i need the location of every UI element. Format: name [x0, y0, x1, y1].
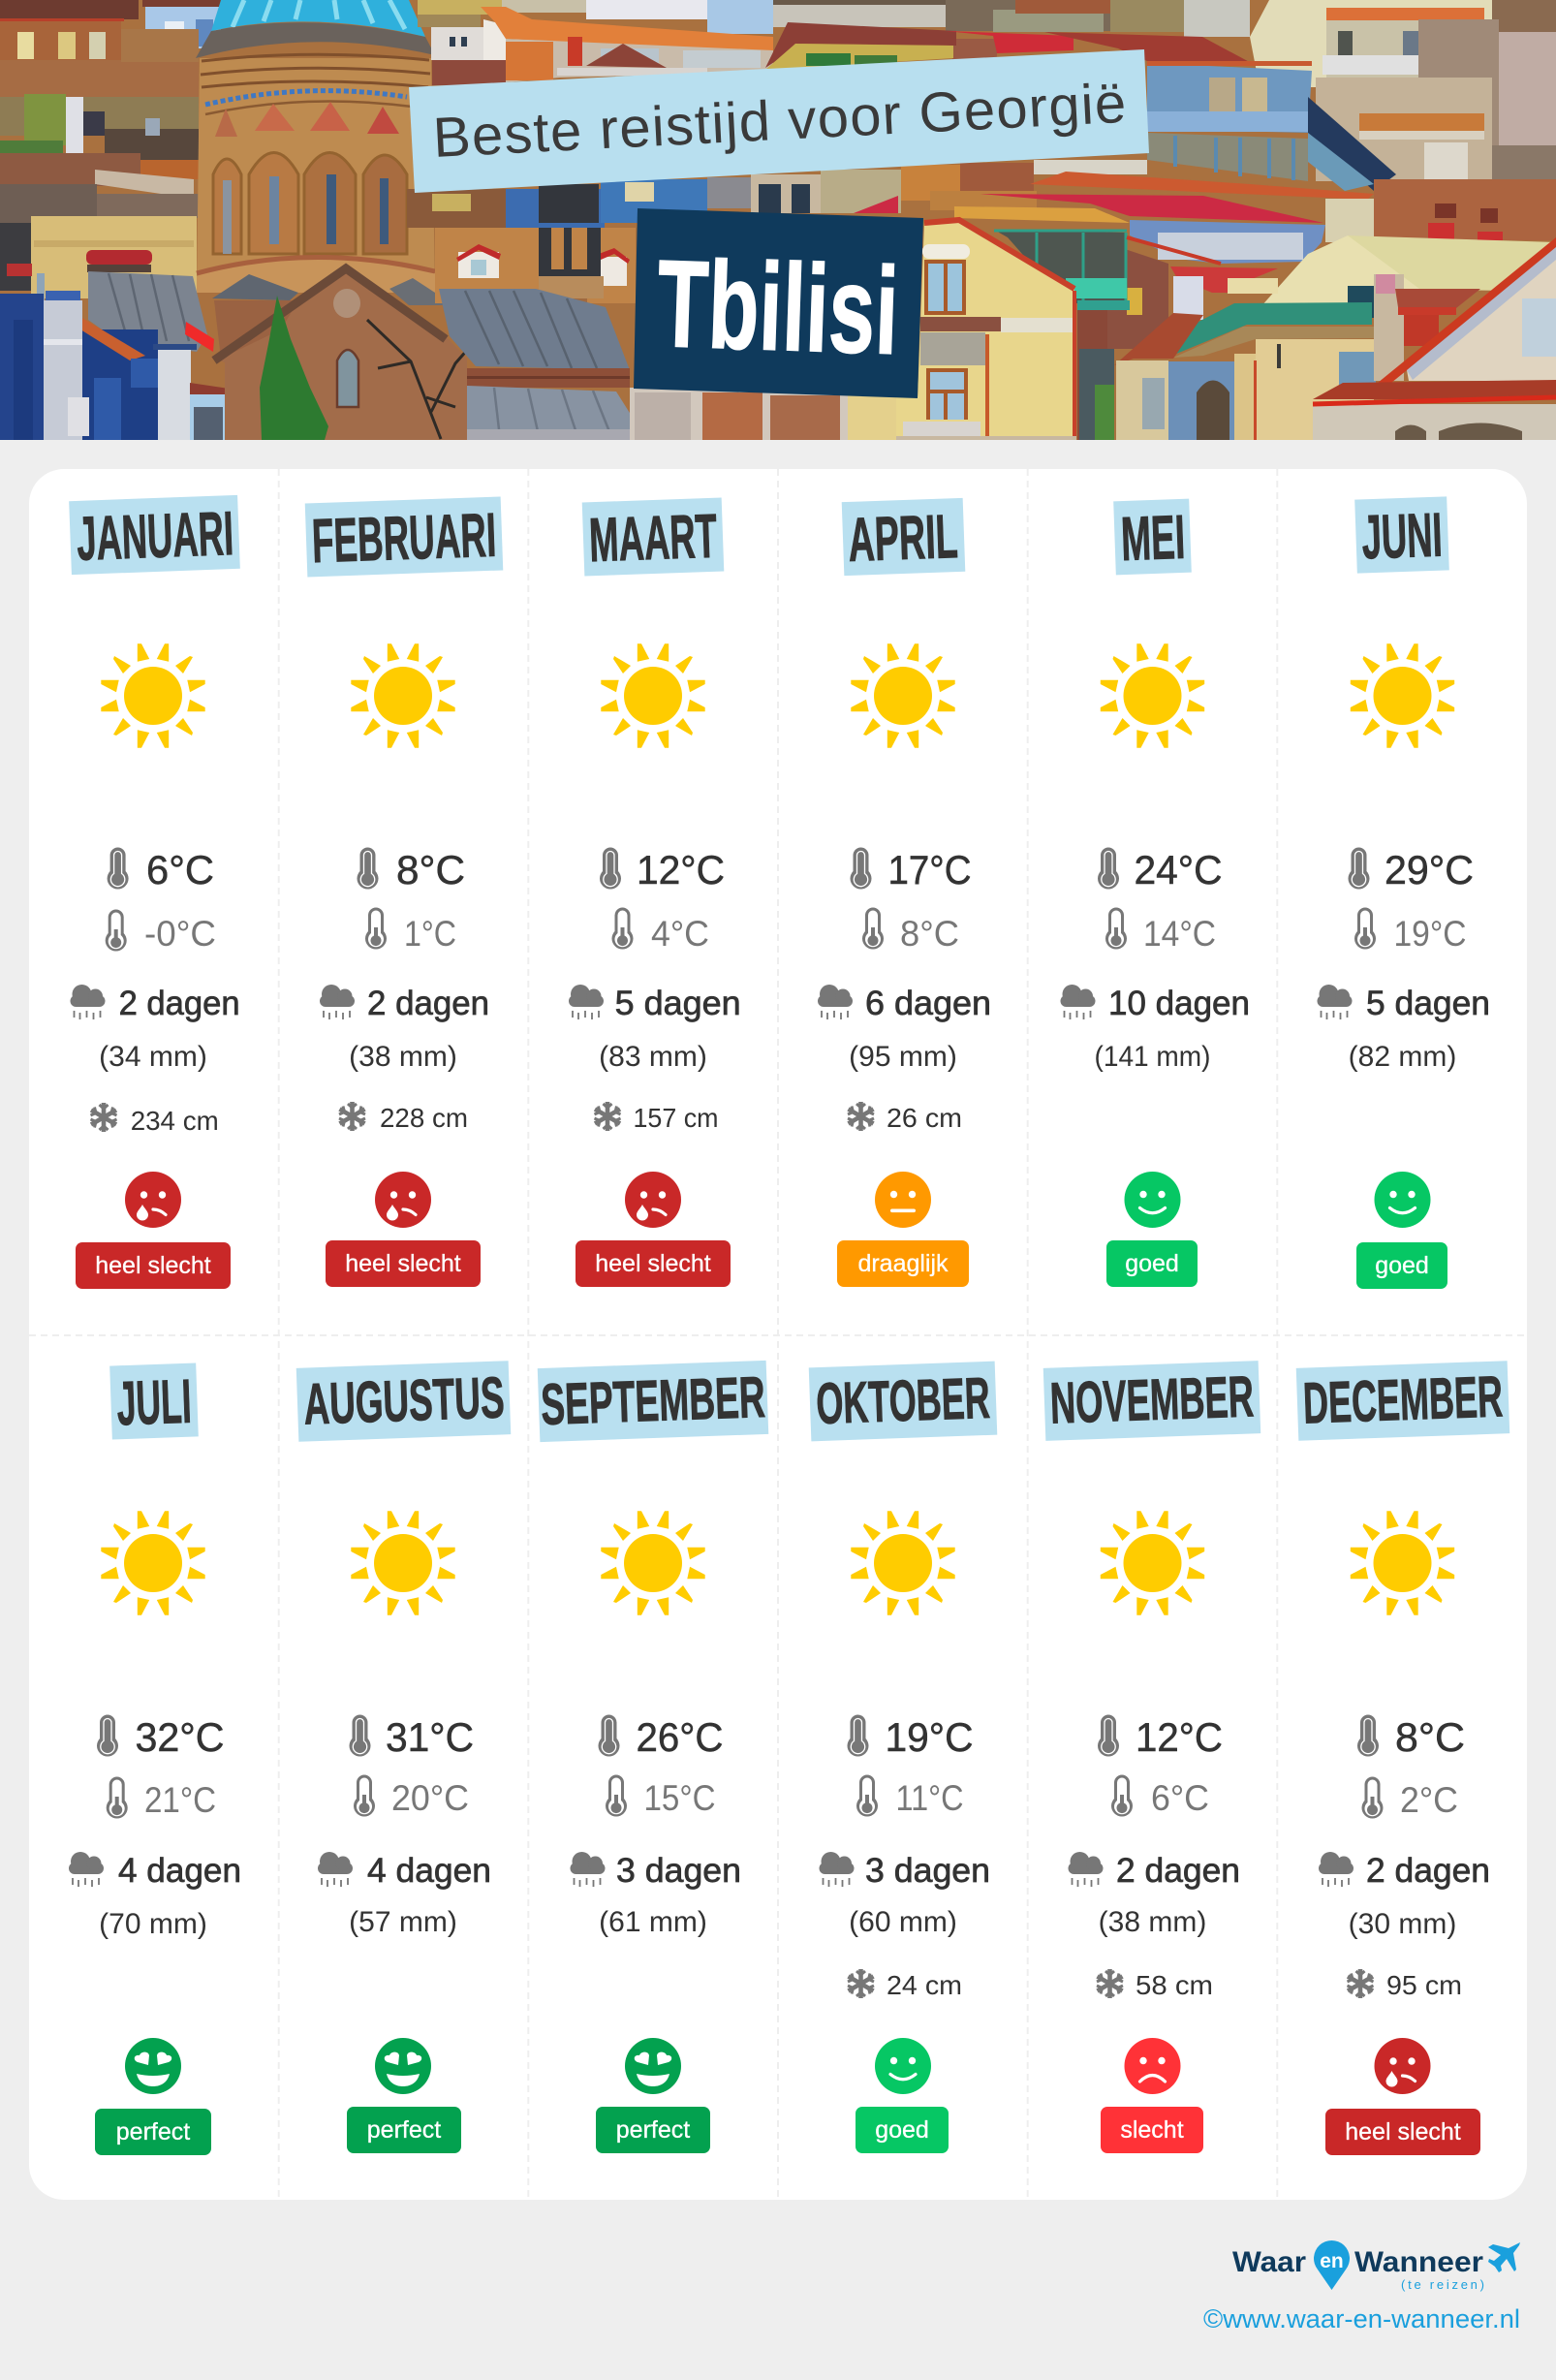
month: juli	[0, 1352, 349, 2155]
rain days: 4 dagen	[367, 1852, 491, 1890]
snow depth	[1347, 1969, 1462, 2000]
icon: map pin: en	[1320, 2250, 1344, 2272]
rain days: 5 dagen	[1366, 985, 1490, 1022]
rating badge: heel slecht	[345, 1250, 461, 1277]
month: mei	[957, 487, 1348, 1287]
rainfall: (61 mm)	[599, 1906, 707, 1938]
month label	[208, 1351, 599, 1452]
tower	[197, 58, 435, 291]
snow depth	[848, 1102, 962, 1133]
low temperature	[856, 1775, 963, 1818]
left hillside	[0, 0, 139, 19]
low temperature: 19°C	[1393, 914, 1467, 954]
snow depth	[1097, 1969, 1213, 2000]
low temperature	[862, 907, 959, 954]
month: maart	[458, 487, 848, 1287]
month label: JUNI	[1360, 499, 1444, 572]
title banner	[409, 49, 1149, 193]
rating face	[1124, 1172, 1180, 1228]
rating face	[1374, 1172, 1430, 1228]
rainfall: (34 mm)	[99, 1041, 207, 1073]
yellow building	[31, 216, 197, 298]
rating badge	[1101, 2107, 1203, 2153]
city banner	[484, 208, 1071, 398]
blue balconies	[1147, 63, 1312, 133]
rating badge: perfect	[116, 2118, 190, 2145]
snow depth: 95 cm	[1386, 1970, 1462, 2000]
snow depth	[339, 1102, 468, 1133]
rainfall: (38 mm)	[1099, 1906, 1206, 1938]
month label	[458, 1351, 848, 1452]
rating badge	[347, 2107, 461, 2153]
low temperature	[1111, 1775, 1209, 1818]
header photo: Tbilisi old town	[0, 0, 1556, 440]
month label: JULI	[115, 1365, 193, 1438]
low temperature: 14°C	[1143, 914, 1216, 954]
high temperature	[1098, 847, 1223, 892]
month label	[0, 485, 350, 586]
website credit: ©www.waar-en-wanneer.nl	[1203, 2304, 1520, 2333]
top right balconies	[1250, 0, 1492, 87]
rating badge	[326, 1240, 481, 1287]
icon: sun	[851, 643, 955, 748]
high temperature: 17°C	[887, 847, 971, 892]
month label	[708, 1351, 1098, 1452]
mid band below title	[407, 189, 506, 228]
low temperature: 6°C	[1151, 1778, 1209, 1818]
snow depth: 228 cm	[380, 1103, 468, 1133]
low temperature: 21°C	[144, 1780, 216, 1820]
icon: sun	[101, 1511, 205, 1615]
low temperature: 1°C	[404, 914, 456, 954]
rating face	[375, 2038, 431, 2094]
high temperature: 32°C	[136, 1714, 225, 1760]
rainfall: (60 mm)	[849, 1906, 957, 1938]
month: september	[458, 1351, 848, 2153]
month label	[458, 487, 848, 588]
high temperature: 8°C	[396, 847, 465, 892]
rain days: 6 dagen	[865, 985, 991, 1022]
logo: Waar en Wanneer	[1232, 2240, 1520, 2292]
rain days: 3 dagen	[616, 1852, 741, 1890]
snow depth	[848, 1969, 962, 2000]
month: juni	[1207, 485, 1556, 1289]
rating face	[625, 1172, 681, 1228]
blue houses	[0, 294, 44, 440]
top band centre	[418, 0, 505, 15]
month label	[0, 1352, 349, 1453]
rainfall: (57 mm)	[349, 1906, 457, 1938]
high temperature	[851, 847, 971, 892]
rainfall: (83 mm)	[599, 1041, 707, 1073]
lower houses	[1256, 339, 1374, 440]
high temperature: 12°C	[1136, 1714, 1223, 1760]
low temperature	[612, 907, 709, 954]
low temperature: 11°C	[895, 1778, 963, 1818]
low temperature	[107, 1777, 216, 1820]
title text: Beste reistijd voor Georgië	[431, 72, 1129, 170]
month label	[209, 487, 599, 588]
snow depth: 26 cm	[887, 1103, 962, 1133]
high temperature	[1357, 1714, 1465, 1760]
green balcony	[994, 230, 1127, 303]
snow depth: 24 cm	[887, 1970, 962, 2000]
low temperature	[606, 1775, 715, 1818]
rating face	[125, 2038, 181, 2094]
rating face	[1124, 2038, 1180, 2094]
right house	[1374, 274, 1404, 381]
low temperature: 2°C	[1400, 1780, 1458, 1820]
dome	[211, 0, 425, 37]
rating badge	[856, 2107, 949, 2153]
gable church	[214, 265, 467, 440]
high temperature	[847, 1714, 973, 1760]
rainfall: (95 mm)	[849, 1041, 957, 1073]
rating face	[125, 1172, 181, 1228]
logo tagline: (te reizen)	[1401, 2277, 1484, 2292]
rain days: 2 dagen	[1366, 1852, 1490, 1890]
high temperature: 29°C	[1385, 847, 1474, 892]
rain days: 5 dagen	[615, 985, 741, 1022]
rating badge	[837, 1240, 969, 1287]
high temperature	[600, 847, 725, 892]
rain days: 3 dagen	[865, 1852, 990, 1890]
rating badge: goed	[875, 2116, 929, 2144]
icon: sun	[851, 1511, 955, 1615]
tiled roofs centre	[435, 228, 636, 303]
rating face	[375, 1172, 431, 1228]
icon: airplane	[1488, 2242, 1520, 2272]
bright red roof	[854, 196, 898, 213]
month label: DECEMBER	[1302, 1364, 1504, 1436]
snow depth	[595, 1102, 719, 1133]
rating face	[875, 1172, 931, 1228]
month label: SEPTEMBER	[540, 1364, 766, 1437]
month label	[1207, 485, 1556, 586]
rating badge: heel slecht	[1345, 2118, 1461, 2145]
low temperature	[365, 907, 456, 954]
rating badge	[576, 1240, 731, 1287]
month label: AUGUSTUS	[302, 1365, 505, 1437]
yellow house	[896, 220, 1074, 436]
month: januari	[0, 485, 350, 1289]
icon: sun	[101, 643, 205, 748]
low temperature	[1354, 907, 1467, 954]
yellow roof	[1348, 235, 1556, 291]
high temperature: 19°C	[886, 1714, 973, 1760]
month label: NOVEMBER	[1049, 1364, 1255, 1436]
icon: sun	[351, 643, 455, 748]
month label: APRIL	[847, 501, 959, 575]
month: februari	[209, 487, 599, 1287]
snow depth	[91, 1103, 219, 1136]
rating badge	[596, 2107, 710, 2153]
rating badge: heel slecht	[595, 1250, 711, 1277]
rating badge: perfect	[367, 2116, 441, 2144]
month: november	[957, 1350, 1347, 2153]
rating badge	[1356, 1242, 1447, 1289]
month label: MAART	[588, 501, 718, 575]
month label: MEI	[1119, 502, 1186, 574]
low temperature: 20°C	[391, 1778, 469, 1818]
brick middle	[1107, 250, 1168, 349]
low temperature: 15°C	[643, 1778, 715, 1818]
icon: sun	[351, 1511, 455, 1615]
high temperature	[1098, 1714, 1223, 1760]
month: december	[1208, 1350, 1556, 2155]
rating badge: goed	[1125, 1250, 1179, 1277]
rain days: 2 dagen	[119, 985, 240, 1022]
logo word: Waar: Waar	[1232, 2246, 1306, 2278]
snow depth: 234 cm	[131, 1106, 219, 1136]
high temperature: 24°C	[1134, 847, 1223, 892]
low temperature: 8°C	[900, 914, 959, 954]
rainfall: (82 mm)	[1349, 1041, 1456, 1073]
month label	[957, 1350, 1347, 1451]
icon: sun	[601, 643, 705, 748]
icon: sun	[601, 1511, 705, 1615]
rating face	[1374, 2038, 1430, 2094]
rainfall: (141 mm)	[1095, 1041, 1211, 1073]
rating badge	[95, 2109, 211, 2155]
rainfall: (70 mm)	[99, 1908, 207, 1940]
logo word: Wanneer: Wanneer	[1354, 2246, 1483, 2278]
panel: monthly climate card	[29, 469, 1527, 2200]
below banner windows	[630, 388, 848, 440]
high temperature: 12°C	[637, 847, 725, 892]
icon: sun	[1351, 643, 1454, 748]
rating badge: goed	[1375, 1252, 1429, 1279]
rainfall: (38 mm)	[349, 1041, 457, 1073]
grey roof left	[88, 271, 207, 359]
rain days: 2 dagen	[367, 985, 489, 1022]
low temperature	[1362, 1777, 1458, 1820]
month label	[1208, 1350, 1556, 1451]
rain days: 4 dagen	[118, 1852, 241, 1890]
month label: FEBRUARI	[311, 500, 497, 576]
red roof + white	[1170, 266, 1278, 293]
icon: map pin	[1314, 2240, 1350, 2290]
rating badge: heel slecht	[95, 1252, 211, 1279]
brick house right	[1374, 179, 1556, 240]
low temperature: 4°C	[651, 914, 709, 954]
month label	[957, 487, 1348, 588]
snow depth: 58 cm	[1136, 1970, 1213, 2000]
rating badge	[1325, 2109, 1480, 2155]
city name: Tbilisi	[655, 235, 900, 381]
rating badge	[1106, 1240, 1198, 1287]
rating face	[625, 2038, 681, 2094]
rain days: 10 dagen	[1108, 985, 1250, 1022]
month: april	[708, 487, 1098, 1287]
month label: JANUARI	[75, 498, 234, 574]
grey roofs centre	[439, 289, 630, 370]
high temperature	[108, 847, 214, 892]
rating face	[875, 2038, 931, 2094]
high temperature	[349, 1714, 474, 1760]
high temperature	[97, 1714, 225, 1760]
rating badge: slecht	[1120, 2116, 1184, 2144]
rating badge	[76, 1242, 231, 1289]
low temperature	[106, 909, 216, 954]
high temperature: 8°C	[1395, 1714, 1465, 1760]
snow depth: 157 cm	[634, 1103, 719, 1133]
high temperature: 6°C	[146, 847, 214, 892]
icon: sun	[1101, 643, 1204, 748]
month: oktober	[708, 1351, 1098, 2153]
month label: OKTOBER	[815, 1365, 991, 1436]
low temperature	[354, 1775, 469, 1818]
month: augustus	[208, 1351, 599, 2153]
high temperature: 31°C	[386, 1714, 474, 1760]
icon: sun	[1101, 1511, 1204, 1615]
rainfall: (30 mm)	[1349, 1908, 1456, 1940]
high temperature	[599, 1714, 723, 1760]
low temperature	[1105, 907, 1216, 954]
rating badge: draaglijk	[857, 1250, 949, 1277]
high temperature	[357, 847, 465, 892]
month label	[708, 487, 1098, 588]
rating badge: perfect	[616, 2116, 690, 2144]
low temperature: -0°C	[144, 914, 216, 954]
high temperature: 26°C	[636, 1714, 723, 1760]
rain days: 2 dagen	[1116, 1852, 1240, 1890]
icon: sun	[1351, 1511, 1454, 1615]
